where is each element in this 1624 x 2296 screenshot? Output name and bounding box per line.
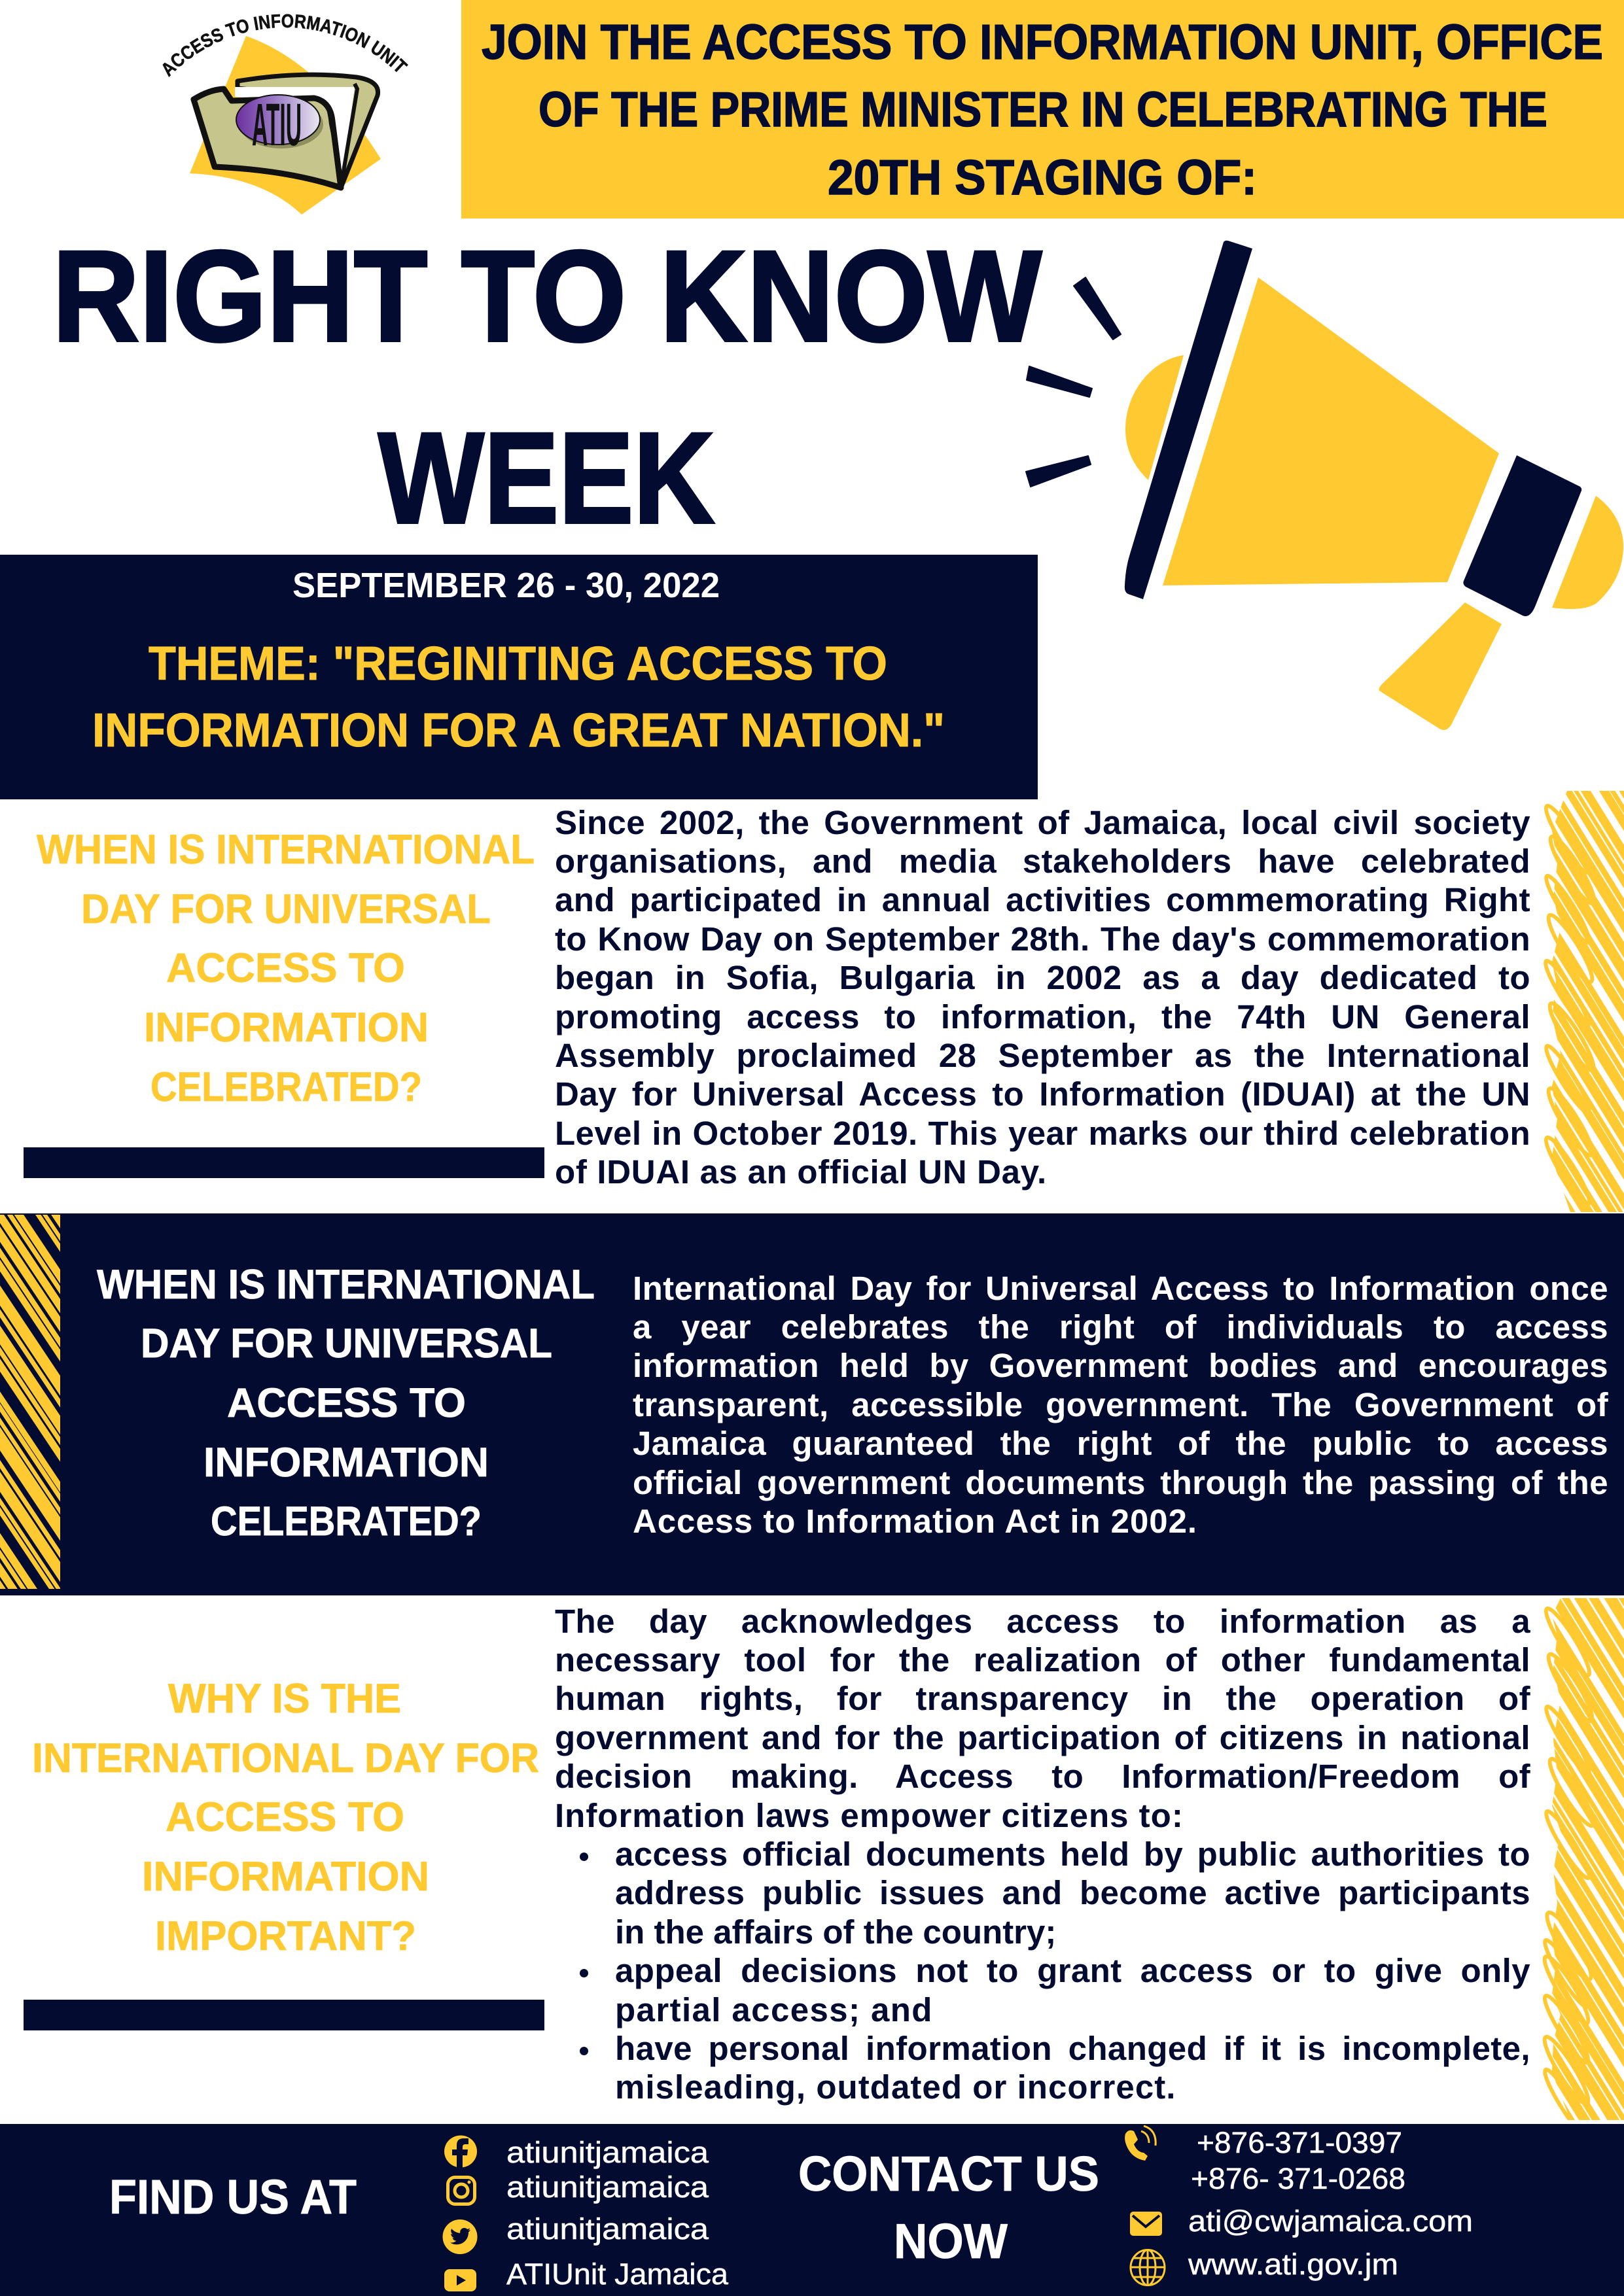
text block: international day explained: International Day for Universal Access to Information once <box>633 1270 1608 1307</box>
text block: why it matters with bullets: misleading, outdated or incorrect. <box>615 2068 1176 2106</box>
heading: why is the day important <box>32 1676 539 1959</box>
header banner: 20TH STAGING OF: <box>828 150 1257 205</box>
title: Right to Know Week: WEEK <box>378 406 715 550</box>
text block: why it matters with bullets: necessary tool for the realization of other fundamental <box>555 1641 1530 1679</box>
footer heading: find us at: FIND US AT <box>109 2170 357 2224</box>
footer heading: contact us now: NOW <box>894 2214 1008 2269</box>
panel: date and theme: THEME: "REGINITING ACCESS TO <box>149 638 887 690</box>
text block: why it matters with bullets: partial access; and <box>615 1991 933 2028</box>
panel: date and theme: INFORMATION FOR A GREAT NATION." <box>92 704 945 757</box>
text block: since 2002: of IDUAI as an official UN Day. <box>555 1153 1047 1191</box>
contact details <box>1188 2126 1473 2281</box>
bar under first heading <box>24 1147 544 1178</box>
text block: since 2002: Level in October 2019. This year marks our third celebration <box>555 1115 1530 1152</box>
panel: date and theme <box>0 555 1038 799</box>
heading: when is international day celebrated (yellow): CELEBRATED? <box>150 1064 422 1110</box>
panel: date and theme: SEPTEMBER 26 - 30, 2022 <box>292 566 720 605</box>
icon: youtube <box>444 2269 476 2291</box>
text block: since 2002: and participated in annual activities commemorating Right <box>555 881 1530 918</box>
contact details: ati@cwjamaica.com <box>1188 2204 1473 2238</box>
heading: why is the day important: ACCESS TO <box>166 1794 404 1840</box>
heading: when is international day celebrated (yellow) <box>37 827 535 1110</box>
icon: facebook <box>444 2135 477 2168</box>
text block: international day explained: a year celebrates the right of individuals to access <box>633 1308 1608 1346</box>
text block: since 2002: to Know Day on September 28th. The day's commemoration <box>555 920 1530 958</box>
text block: since 2002: Since 2002, the Government of Jamaica, local civil society <box>555 804 1530 841</box>
text block: since 2002: Day for Universal Access to Information (IDUAI) at the UN <box>555 1075 1530 1113</box>
heading: when is international day celebrated (white) <box>97 1262 595 1544</box>
text block: international day explained <box>633 1270 1608 1540</box>
footer heading: contact us now: CONTACT US <box>798 2146 1099 2201</box>
heading: when is international day celebrated (yellow): WHEN IS INTERNATIONAL <box>37 827 535 873</box>
heading: when is international day celebrated (yellow): INFORMATION <box>144 1005 429 1051</box>
social handles: atiunitjamaica <box>506 2170 709 2204</box>
text block: since 2002 <box>555 804 1530 1191</box>
icon: twitter <box>442 2219 478 2254</box>
title: Right to Know Week <box>52 224 1042 550</box>
text block: why it matters with bullets: have personal information changed if it is incomplete, <box>615 2030 1530 2067</box>
logo: Access to Information Unit: ATIU <box>252 92 302 158</box>
text block: why it matters with bullets: Information laws empower citizens to: <box>555 1797 1184 1834</box>
text block: international day explained: information held by Government bodies and encourages <box>633 1347 1608 1384</box>
text block: international day explained: transparent, accessible government. The Government of <box>633 1386 1608 1423</box>
contact details: +876- 371-0268 <box>1191 2162 1405 2195</box>
decoration: yellow scribble top right <box>1541 791 1624 1212</box>
contact details: +876-371-0397 <box>1197 2126 1402 2159</box>
heading: why is the day important: WHY IS THE <box>168 1676 401 1722</box>
heading: when is international day celebrated (white): DAY FOR UNIVERSAL <box>141 1321 552 1366</box>
icon: phone <box>1125 2126 1156 2161</box>
logo: Access to Information Unit <box>162 14 408 215</box>
panel: footer <box>0 2124 1624 2296</box>
social handles: atiunitjamaica <box>506 2136 709 2169</box>
heading: why is the day important: IMPORTANT? <box>155 1913 416 1959</box>
heading: why is the day important: INTERNATIONAL DAY FOR <box>32 1735 539 1781</box>
text block: since 2002: organisations, and media stakeholders have celebrated <box>555 843 1530 880</box>
title: Right to Know Week: RIGHT TO KNOW <box>52 224 1042 368</box>
social handles <box>506 2136 729 2291</box>
text block: why it matters with bullets: access official documents held by public authorities to <box>615 1835 1530 1873</box>
text block: international day explained: official government documents through the passing of the <box>633 1464 1608 1501</box>
text block: why it matters with bullets: government and for the participation of citizens in national <box>555 1719 1530 1756</box>
text block: international day explained: Access to Information Act in 2002. <box>633 1503 1197 1540</box>
icon: mail <box>1130 2212 1162 2236</box>
icon: megaphone <box>1026 241 1623 730</box>
text block: since 2002: began in Sofia, Bulgaria in 2002 as a day dedicated to <box>555 959 1530 996</box>
text block: why it matters with bullets <box>555 1603 1530 2106</box>
social handles: atiunitjamaica <box>506 2212 709 2246</box>
panel: navy band <box>0 1213 1624 1595</box>
icon: globe <box>1131 2250 1165 2286</box>
heading: when is international day celebrated (white): ACCESS TO <box>227 1380 466 1426</box>
text block: international day explained: Jamaica guaranteed the right of the public to access <box>633 1425 1608 1462</box>
decoration: yellow scribble lower right <box>1539 1598 1624 2140</box>
bar under third heading <box>24 2000 544 2030</box>
heading: when is international day celebrated (yellow): ACCESS TO <box>166 945 405 991</box>
text block: why it matters with bullets: The day acknowledges access to information as a <box>555 1603 1530 1640</box>
heading: when is international day celebrated (white): WHEN IS INTERNATIONAL <box>97 1262 595 1308</box>
text block: why it matters with bullets: address public issues and become active participants <box>615 1874 1530 1911</box>
text block: since 2002: promoting access to information, the 74th UN General <box>555 998 1530 1035</box>
logo: Access to Information Unit: ACCESS TO INFORMATION UNIT <box>162 14 408 77</box>
social handles: ATIUnit Jamaica <box>506 2257 729 2291</box>
contact details: www.ati.gov.jm <box>1188 2248 1398 2281</box>
text block: why it matters with bullets: in the affairs of the country; <box>615 1913 1056 1951</box>
heading: when is international day celebrated (yellow): DAY FOR UNIVERSAL <box>81 886 491 932</box>
text block: why it matters with bullets: appeal decisions not to grant access or to give only <box>615 1952 1530 1989</box>
heading: when is international day celebrated (white): CELEBRATED? <box>211 1499 482 1544</box>
text block: why it matters with bullets: decision making. Access to Information/Freedom of <box>555 1758 1530 1795</box>
icon: instagram <box>448 2177 475 2204</box>
header banner <box>461 0 1624 218</box>
text block: why it matters with bullets: human rights, for transparency in the operation of <box>555 1680 1530 1717</box>
heading: when is international day celebrated (white): INFORMATION <box>203 1440 489 1486</box>
text block: since 2002: Assembly proclaimed 28 September as the International <box>555 1037 1530 1074</box>
footer heading: contact us now <box>798 2146 1099 2269</box>
heading: why is the day important: INFORMATION <box>142 1854 429 1900</box>
